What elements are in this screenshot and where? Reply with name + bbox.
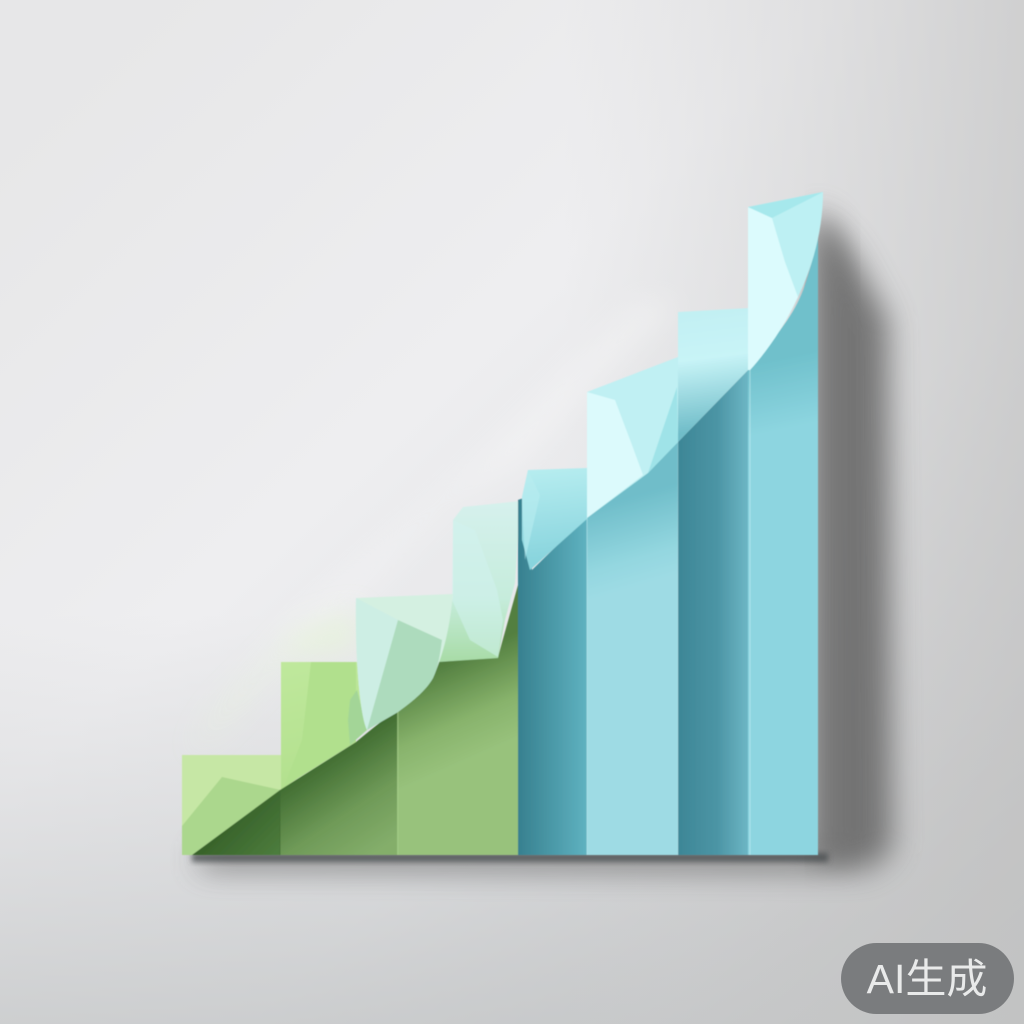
chart: stepped paper bars <box>182 192 823 855</box>
cast shadow <box>190 205 892 870</box>
blue bar 1 <box>518 468 588 855</box>
badge: AI generated <box>841 943 1014 1014</box>
green bar 4 mint top <box>438 501 520 662</box>
blue bar 4 <box>748 192 823 855</box>
green bar 3 column <box>397 585 518 855</box>
bar edge lines <box>280 368 750 855</box>
green bar 3 facets <box>356 594 453 730</box>
blue bar 3 <box>678 308 750 855</box>
badge: AI generated: AI生成 <box>867 956 987 1002</box>
blue bar 2 <box>587 357 678 855</box>
green bar 1 <box>182 755 281 855</box>
green bar 2 <box>280 662 398 855</box>
